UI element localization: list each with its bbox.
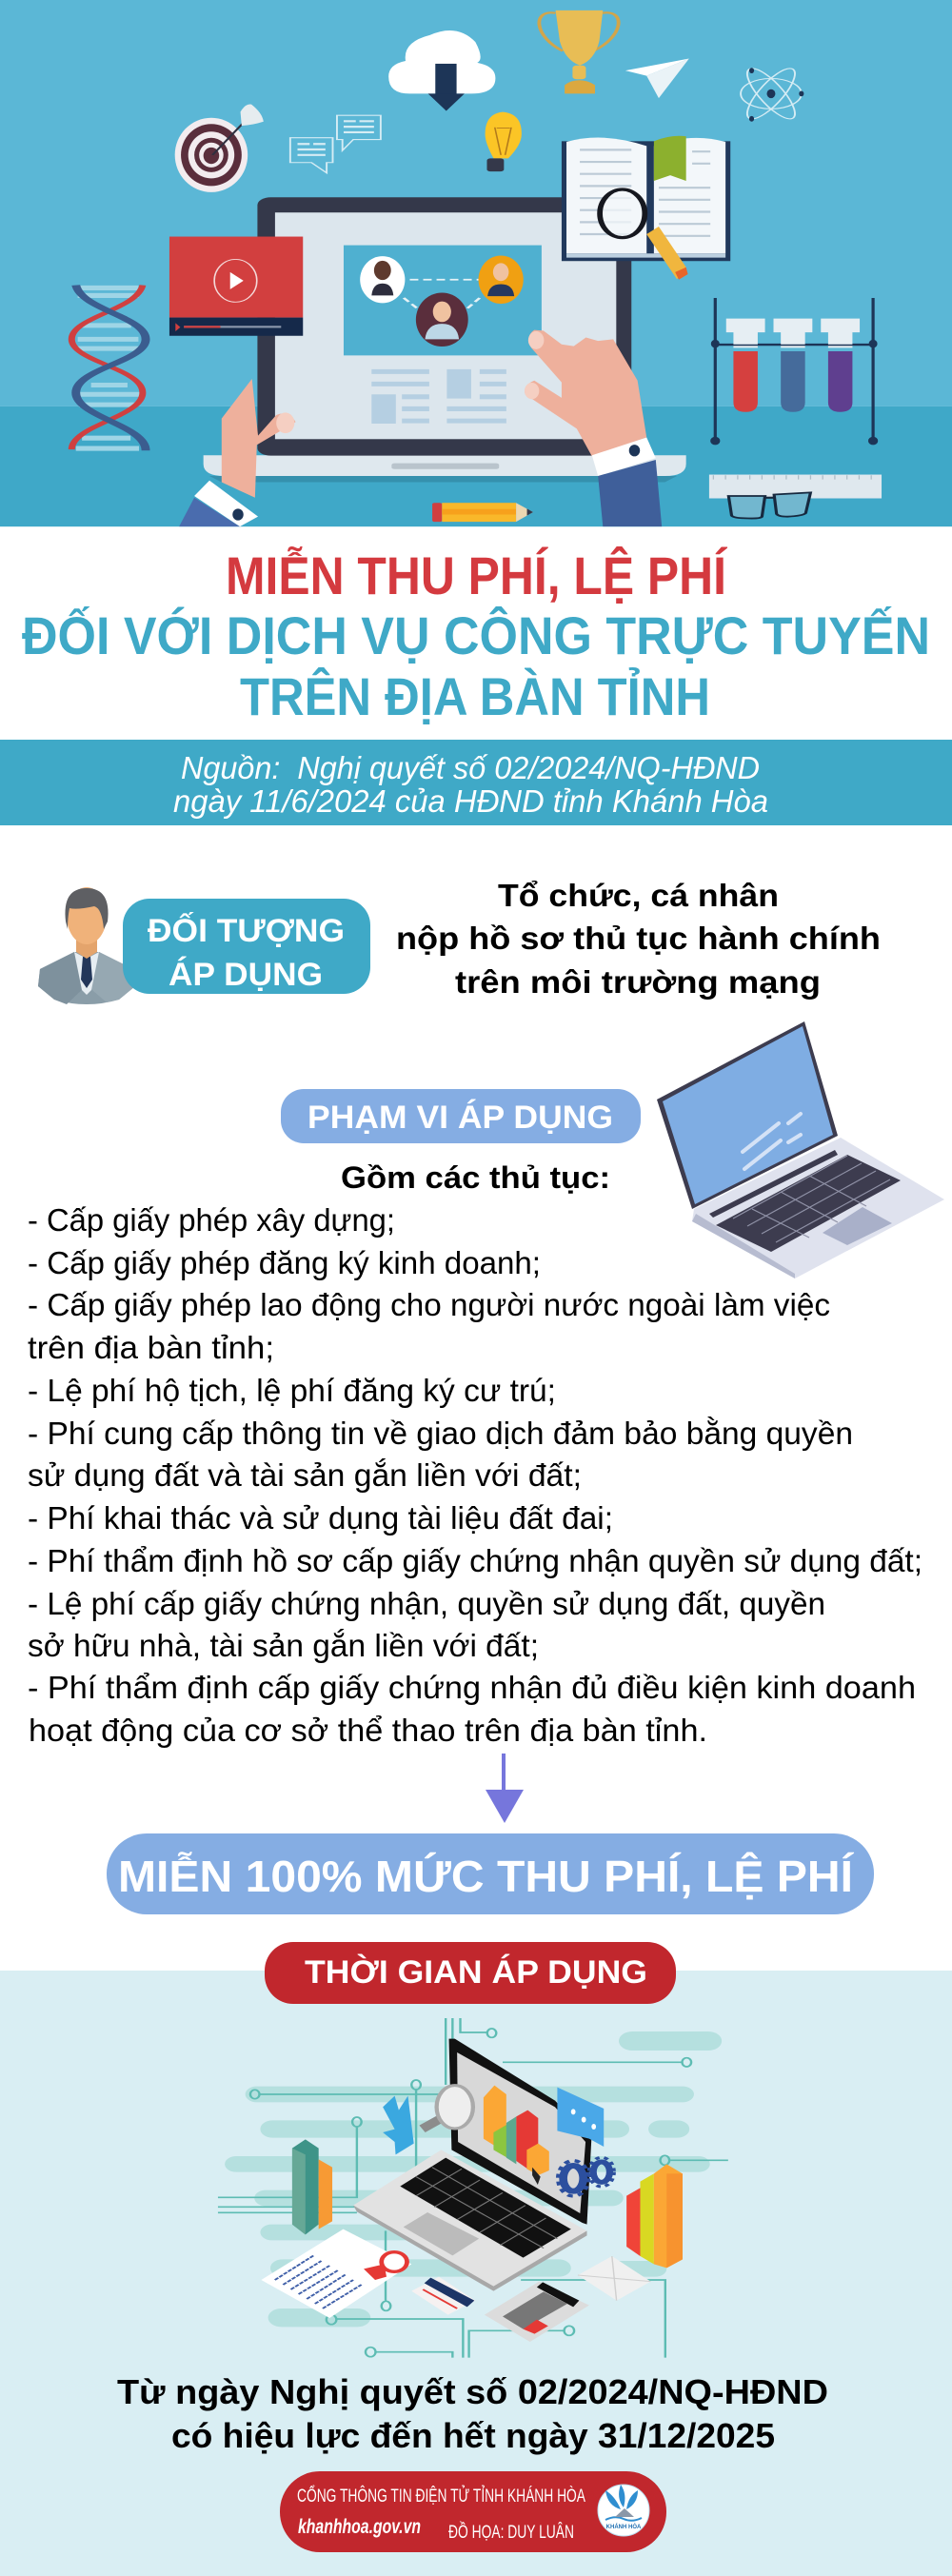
text: procedures list: - Phí khai thác và sử dụng tài liệu đất đai;	[28, 1500, 613, 1536]
icon: left hand	[179, 379, 296, 526]
source band: Nguồn: Nghị quyết số 02/2024/NQ-HĐND	[181, 750, 760, 785]
pill: phạm vi áp dụng	[281, 1089, 641, 1143]
text: effective period: Từ ngày Nghị quyết số 02/2024/NQ-HĐND	[117, 2372, 828, 2411]
text: đối tượng description: trên môi trường mạng	[455, 964, 821, 1000]
icon: magnifier	[419, 2086, 473, 2132]
text: procedures list: - Cấp giấy phép xây dựng;	[28, 1202, 395, 1238]
icon: open book with magnifier	[562, 136, 730, 280]
pill: đối tượng áp dụng	[123, 899, 370, 994]
text: effective period	[117, 2372, 828, 2455]
icon: chat bubble	[557, 2088, 604, 2147]
icon: businessman	[38, 887, 135, 1004]
title: TRÊN ĐỊA BÀN TỈNH	[240, 666, 710, 726]
icon: calculator	[485, 2282, 589, 2342]
illustration: laptop with charts	[218, 2018, 728, 2358]
icon: Khánh Hòa logo	[598, 2485, 649, 2536]
icon: trophy	[539, 10, 619, 93]
icon: certificate	[261, 2229, 411, 2318]
icon: ruler and glasses	[709, 475, 882, 519]
footer badge: khanhhoa.gov.vn	[298, 2516, 421, 2538]
text: procedures list: - Lệ phí hộ tịch, lệ phí đăng ký cư trú;	[28, 1373, 556, 1408]
title	[22, 545, 930, 726]
text: effective period: có hiệu lực đến hết ngày 31/12/2025	[171, 2416, 775, 2455]
icon: laptop	[657, 1021, 944, 1278]
text: procedures list: - Cấp giấy phép đăng ký kinh doanh;	[28, 1245, 541, 1280]
pill: thời gian áp dụng	[265, 1942, 676, 2004]
icon: cloud download	[388, 30, 495, 110]
pill: phạm vi áp dụng: PHẠM VI ÁP DỤNG	[307, 1100, 613, 1136]
text: đối tượng description: nộp hồ sơ thủ tục hành chính	[396, 921, 881, 956]
footer badge: CỔNG THÔNG TIN ĐIỆN TỬ TỈNH KHÁNH HÒA	[297, 2486, 585, 2507]
text: procedures list: trên địa bàn tỉnh;	[28, 1330, 274, 1365]
text: procedures list: sử dụng đất và tài sản gắn liền với đất;	[28, 1457, 582, 1493]
text: procedures list: - Phí cung cấp thông tin về giao dịch đảm bảo bằng quyền	[28, 1416, 853, 1451]
text: procedures list: sở hữu nhà, tài sản gắn liền với đất;	[28, 1628, 539, 1663]
icon: Khánh Hòa logo: KHÁNH HÒA	[606, 2523, 642, 2530]
pill: miễn 100%	[107, 1833, 874, 1914]
arrow	[486, 1754, 524, 1823]
icon: credit card	[411, 2277, 475, 2315]
pill: thời gian áp dụng: THỜI GIAN ÁP DỤNG	[305, 1954, 647, 1991]
icon: paper plane	[625, 59, 689, 98]
icon: left 3D bar	[292, 2139, 332, 2234]
hero illustration	[0, 0, 952, 526]
source band	[0, 740, 952, 825]
decorative bars and circuit lines	[218, 2018, 728, 2358]
footer badge: ĐỒ HỌA: DUY LUÂN	[448, 2522, 574, 2543]
source band: ngày 11/6/2024 của HĐND tỉnh Khánh Hòa	[173, 783, 768, 819]
text: procedures list: - Cấp giấy phép lao động cho người nước ngoài làm việc	[28, 1287, 830, 1322]
title: MIỄN THU PHÍ, LỆ PHÍ	[226, 545, 727, 605]
icon: gears	[558, 2157, 614, 2196]
icon: speech bubbles	[290, 115, 381, 173]
pill: miễn 100%: MIỄN 100% MỨC THU PHÍ, LỆ PHÍ	[118, 1852, 854, 1901]
pill: đối tượng áp dụng: ÁP DỤNG	[169, 957, 323, 993]
icon: test tube rack	[710, 298, 878, 445]
panel: thời gian background	[0, 1971, 952, 2576]
icon: light bulb	[486, 112, 522, 171]
icon: pencil	[432, 503, 533, 522]
pill: đối tượng áp dụng: ĐỐI TƯỢNG	[148, 912, 345, 949]
text: procedures list: - Phí thẩm định hồ sơ cấp giấy chứng nhận quyền sử dụng đất;	[28, 1543, 922, 1578]
text: đối tượng description: Tổ chức, cá nhân	[498, 878, 779, 913]
footer badge	[280, 2471, 666, 2552]
icon: video player	[169, 237, 303, 336]
icon: blue symbol	[383, 2096, 414, 2154]
icon: envelope	[578, 2256, 650, 2301]
text: procedures list: - Phí thẩm định cấp giấy chứng nhận đủ điều kiện kinh doanh	[28, 1670, 916, 1705]
icon: atom	[739, 66, 803, 122]
icon: right hand	[525, 330, 662, 526]
text: đối tượng description	[396, 878, 881, 1000]
text: procedures list	[28, 1202, 922, 1748]
icon: laptop with people network	[204, 197, 686, 483]
icon: dart target	[175, 105, 264, 192]
icon: right 3D bars	[626, 2164, 683, 2268]
icon: DNA helix	[71, 286, 146, 450]
icon: isometric laptop	[353, 2039, 591, 2291]
text: procedures list: hoạt động của cơ sở thể thao trên địa bàn tỉnh.	[29, 1713, 707, 1748]
heading: gồm các thủ tục: Gồm các thủ tục:	[341, 1160, 610, 1195]
text: procedures list: - Lệ phí cấp giấy chứng nhận, quyền sử dụng đất, quyền	[28, 1586, 825, 1621]
